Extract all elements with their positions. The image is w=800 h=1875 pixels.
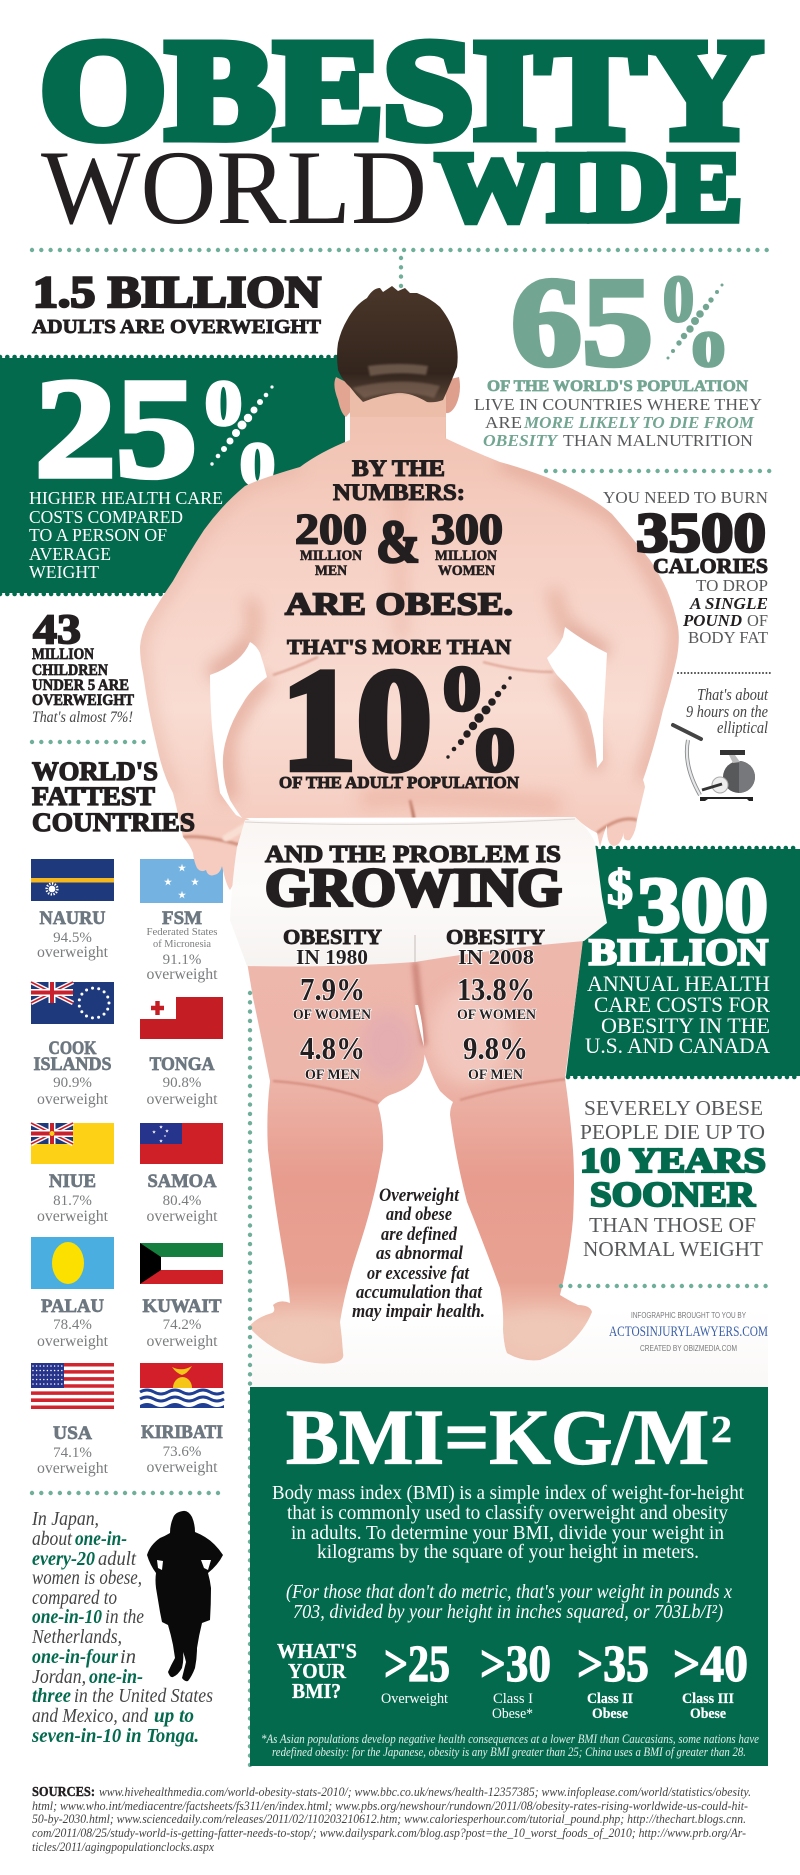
flag: Tonga [140,997,223,1039]
what's your BMI: WHAT'S [277,1639,357,1663]
stat: 10 years sooner: THAN THOSE OF [589,1213,756,1237]
text block: Japan comparison: up to [154,1705,194,1727]
BMI class: class II obese [577,1636,649,1722]
stat: 10 years sooner: NORMAL WEIGHT [583,1237,763,1261]
flag: Kuwait [140,1243,223,1284]
stat: 1.5 billion adults: ADULTS ARE OVERWEIGHT [32,316,321,338]
stat: 43 million children: OVERWEIGHT [32,692,135,709]
big number 25%: 0 [205,368,242,438]
text block: the problem is growing: GROWING [265,858,562,918]
heading: NUMBERS: [333,480,465,505]
country: Nauru: NAURU [40,908,106,929]
panel: 300 billion [566,848,800,1077]
icon: woman silhouette [147,1511,223,1681]
what's your BMI [277,1639,357,1703]
column: obesity in 2008: 9.8% [463,1030,528,1066]
country: Kuwait: 74.2% [163,1317,201,1333]
stat: 3500 calories: TO DROP [696,576,768,595]
BMI class: class I obese: Class I [493,1691,533,1707]
stat: 43 million children: MILLION [32,646,94,663]
stat: 65 percent [474,252,762,450]
sources: ticles/2011/agingpopulationclocks.aspx [32,1839,214,1854]
BMI class: overweight: Overweight [381,1691,449,1707]
big number 25%: 25 [35,349,197,507]
stat: 10 years sooner [580,1096,766,1261]
stat: 3500 calories: CALORIES [653,554,768,578]
text block: Japan comparison: one-in-four [32,1646,118,1668]
column: obesity in 2008: OF MEN [468,1067,523,1083]
heading [333,456,465,505]
country: Kiribati: 73.6% [163,1444,201,1460]
text block: Japan comparison: adult [98,1548,136,1570]
BMI class: class III obese: Class III [682,1691,734,1707]
caption: ANNUAL HEALTH [587,971,770,996]
text block: Japan comparison: and Mexico, and [32,1705,149,1727]
BMI class: class I obese: Obese* [492,1706,533,1722]
text block: definition of overweight [352,1185,485,1322]
country: Kiribati: overweight [146,1459,218,1476]
stat: 43 million children: CHILDREN [32,662,108,679]
column: obesity in 2008 [446,925,545,1083]
legs [240,930,600,1370]
big number $300 billion: $ [607,859,633,915]
column: obesity in 1980: 4.8% [300,1030,365,1066]
country: Kiribati [141,1422,223,1476]
text block: Japan comparison: one-in- [75,1528,127,1550]
country: Cook Islands: COOK [48,1038,97,1059]
BMI class: class III obese: >40 [673,1636,748,1693]
country: Niue [37,1171,109,1225]
gaps between arms and body [210,642,267,818]
country: Samoa: overweight [146,1208,218,1225]
column: obesity in 1980: OBESITY [283,925,382,949]
BMI class: class II obese: >35 [577,1636,649,1693]
metric note: 703, divided by your height in inches squared, or 703Lb/I²) [293,1602,723,1623]
country: Cook Islands [34,1038,112,1108]
floor shadow [252,1310,768,1387]
country: Palau: PALAU [41,1296,104,1317]
text block: definition of overweight: accumulation that [356,1282,483,1303]
are obese: ARE OBESE. [285,586,513,622]
BMI class: class I obese [480,1636,551,1722]
column: obesity in 1980: 7.9% [300,971,365,1007]
head and neck [334,286,460,445]
text block: by the numbers [279,456,520,801]
stat: 43 million children: That's almost 7%! [32,709,133,726]
BMI definition: kilograms by the square of your height in meters. [317,1542,699,1563]
caption: CARE COSTS FOR [594,992,770,1017]
200 million men [295,506,367,579]
hair [337,286,458,402]
BMI definition: in adults. To determine your BMI, divide your weight in [291,1523,724,1544]
text block: Japan comparison: seven-in-10 in Tonga. [31,1725,199,1747]
country: Palau: overweight [37,1333,109,1350]
big number $300 billion [589,859,768,974]
big number 65%: 0 [663,263,694,336]
flag: USA [31,1363,114,1409]
caption: COSTS COMPARED [29,507,183,527]
text block: Japan comparison: in the United States [74,1685,213,1707]
note: elliptical hours: elliptical [717,718,768,737]
200 million men: MEN [315,563,347,579]
country: Kuwait: KUWAIT [142,1296,222,1317]
300 million women: MILLION [435,548,497,564]
big number 25%: 0 [240,432,275,499]
title [40,10,762,246]
big number 25% [35,349,275,507]
BMI class: class I obese: >30 [480,1636,551,1693]
sources: html; www.who.int/mediacentre/factsheets/fs311/en/index.html; www.pbs.org/newshour/rundown/2011/08/obesity-rates-rising-worldwide-us-could-hit- [32,1798,748,1813]
note: elliptical hours: 9 hours on the [686,702,768,721]
credits [609,1311,768,1353]
torso and arms [130,410,690,900]
text block: Japan comparison: three [32,1685,71,1707]
sources [32,1784,751,1854]
country: Niue: 81.7% [53,1193,92,1209]
metric note [286,1582,732,1623]
heading: BY THE [352,456,445,481]
text block: the problem is growing: AND THE PROBLEM IS [265,842,561,868]
stat: 43 million children: UNDER 5 ARE [32,677,129,694]
country: FSM: overweight [146,966,218,983]
BMI class: class III obese [673,1636,748,1722]
stat: 65 percent: OBESITY [483,431,559,450]
text block: definition of overweight: or excessive fat [367,1263,470,1284]
of the adult population: OF THE ADULT POPULATION [279,773,520,792]
stat: 3500 calories: BODY FAT [688,628,769,647]
text block: definition of overweight: and obese [386,1204,452,1225]
title line: wide: WIDE [436,133,742,242]
stat: 3500 calories: POUND [682,611,742,630]
title line: world: WORLD [41,129,427,246]
text block: Japan comparison: In Japan, [31,1508,99,1530]
stat: 65 percent: THAN MALNUTRITION [563,431,753,450]
BMI class: class II obese: Obese [592,1706,628,1722]
stat: 3500 calories: OF [747,611,768,630]
text block: definition of overweight: as abnormal [376,1243,464,1264]
text block: definition of overweight: are defined [381,1224,457,1245]
country: USA: 74.1% [53,1445,92,1461]
stat: 65 percent: ARE [485,413,522,432]
text block: the problem is growing [265,842,562,1083]
caption: AVERAGE [29,544,111,564]
text block: Japan comparison: in the [105,1606,144,1628]
country: Tonga [146,1054,218,1108]
text block: Japan comparison: one-in-10 [32,1606,102,1628]
country: Cook Islands: ISLANDS [34,1054,112,1075]
country statistics [34,908,223,1477]
note: elliptical hours: That's about [697,685,768,704]
stat: 3500 calories: YOU NEED TO BURN [603,488,768,507]
column: obesity in 1980: OF MEN [305,1067,360,1083]
stat: 1.5 billion adults [32,268,321,338]
stat: 3500 calories [603,488,769,647]
flag: Palau [31,1237,114,1289]
country: Tonga: TONGA [150,1054,215,1075]
BMI definition [272,1483,745,1563]
country: FSM: 91.1% [163,952,201,968]
caption: HIGHER HEALTH CARE [29,488,223,508]
country: Nauru: 94.5% [53,930,92,946]
what's your BMI: YOUR [288,1659,347,1683]
credits: CREATED BY OBIZMEDIA.COM [640,1344,737,1353]
country: USA [37,1423,109,1477]
column: obesity in 1980: OF WOMEN [293,1007,371,1023]
BMI class: overweight [381,1636,450,1707]
big number 10% [281,639,515,801]
caption: U.S. AND CANADA [585,1033,770,1058]
big number 65% [511,252,725,392]
panel: BMI explanation [250,1387,768,1766]
heading: world's fattest countries: COUNTRIES [32,808,195,837]
flag: Kiribati [140,1363,224,1408]
big number 10%: 0 [475,717,515,785]
column: obesity in 2008: OF WOMEN [457,1007,536,1023]
flags of the fattest countries [31,859,224,1409]
country: Palau: 78.4% [53,1317,92,1333]
country: Samoa: 80.4% [163,1193,201,1209]
big number 65%: 65 [511,252,653,392]
BMI class: overweight: >25 [384,1636,450,1693]
300 million women: 300 [431,506,503,554]
country: Nauru: overweight [37,944,109,961]
country: USA: overweight [37,1460,109,1477]
stat: 1.5 billion adults: 1.5 BILLION [33,268,321,316]
BMI definition: Body mass index (BMI) is a simple index of weight-for-height [272,1483,745,1504]
300 million women [431,506,503,579]
300 million women: WOMEN [438,563,496,579]
stat: 3500 calories: A SINGLE [689,594,768,613]
caption [29,488,223,582]
stat: 10 years sooner: 10 YEARS [580,1141,766,1180]
caption: OBESITY IN THE [601,1013,770,1038]
what's your BMI: BMI? [292,1679,341,1703]
heading: world's fattest countries: FATTEST [32,782,155,811]
flag: Cook Islands [31,982,114,1024]
stat: 10 years sooner: PEOPLE DIE UP TO [580,1120,765,1144]
flag: Samoa [140,1123,223,1164]
country: USA: USA [53,1423,92,1444]
flag: Niue [31,1123,114,1164]
flag: Nauru [31,859,114,901]
country: FSM: FSM [162,908,202,929]
country: FSM: of Micronesia [153,938,211,950]
country: Tonga: overweight [146,1091,218,1108]
big number 10%: 10 [281,639,432,801]
200 million men: 200 [295,506,367,554]
country: Niue: overweight [37,1208,109,1225]
country: Samoa [146,1171,218,1225]
panel: 25 percent health care costs [0,349,345,594]
text block: Japan comparison: in [120,1646,136,1668]
stat: 65 percent: MORE LIKELY TO DIE FROM [523,413,755,432]
ampersand: & [376,509,420,575]
text block: Japan comparison: Netherlands, [31,1626,122,1648]
text block: Japan comparison: Jordan, [32,1666,86,1688]
note: elliptical hours [686,685,768,737]
country: Niue: NIUE [49,1171,96,1192]
text block: definition of overweight: may impair health. [352,1301,485,1322]
caption [585,971,770,1058]
stat: 3500 calories: 3500 [636,502,766,564]
country: FSM [146,908,218,983]
country: FSM: Federated States [146,926,218,938]
text block: Japan comparison: one-in- [89,1666,143,1688]
country: Cook Islands: 90.9% [53,1075,92,1091]
column: obesity in 2008: 13.8% [457,971,535,1007]
sources: SOURCES: [32,1785,95,1800]
caption: OF THE WORLD'S POPULATION [487,378,748,395]
text block: definition of overweight: Overweight [379,1185,460,1206]
country: Palau [37,1296,109,1350]
underwear [230,817,607,966]
big number $300 billion: BILLION [589,932,768,974]
BMI class: class III obese: Obese [690,1706,726,1722]
BMI formula: 2 [711,1409,732,1451]
country: Kiribati: KIRIBATI [141,1422,223,1443]
text block: Japan comparison: compared to [32,1587,117,1609]
footnote [261,1732,759,1759]
column: obesity in 1980 [283,925,382,1083]
text block: Japan comparison: every-20 [32,1548,95,1570]
title line: obesity: OBESITY [40,10,762,168]
stat: 10 years sooner: SOONER [590,1175,756,1214]
column: obesity in 2008: IN 2008 [458,945,534,969]
country: Cook Islands: overweight [37,1091,109,1108]
country: Kuwait: overweight [146,1333,218,1350]
country: Nauru [37,908,109,961]
sources: 50-by-2030.html; www.sciencedaily.com/releases/2011/02/110203210612.htm; www.caloriesperhour.com/tutorial_pound.php; http://thechart.blogs.cnn. [32,1811,746,1826]
heading: world's fattest countries [32,757,195,837]
big number 65%: 0 [692,320,725,376]
stat: 65 percent: LIVE IN COUNTRIES WHERE THEY [474,395,762,414]
country: Kuwait [142,1296,222,1350]
country: Samoa: SAMOA [148,1171,217,1192]
caption: TO A PERSON OF [29,525,167,545]
text block: Japan comparison: about [32,1528,72,1550]
caption: WEIGHT [29,562,99,582]
heading: world's fattest countries: WORLD'S [32,757,158,786]
column: obesity in 1980: IN 1980 [296,945,368,969]
that's more than: THAT'S MORE THAN [287,635,511,659]
stat: 43 million children [32,608,135,726]
BMI definition: that is commonly used to classify overweight and obesity [287,1503,728,1524]
credits: INFOGRAPHIC BROUGHT TO YOU BY [631,1311,747,1320]
country: Tonga: 90.8% [163,1075,201,1091]
icon: elliptical machine [673,725,755,801]
flag: FSM [140,859,223,903]
BMI class: class II obese: Class II [587,1691,633,1707]
text block: Japan comparison [31,1508,213,1747]
BMI formula: BMI=KG/M [286,1394,709,1480]
big number $300 billion: 300 [637,861,768,948]
column: obesity in 2008: OBESITY [446,925,545,949]
photo: overweight man from behind [130,286,690,1370]
stat: 43 million children: 43 [33,608,81,654]
big number 10%: 0 [443,653,481,724]
stat: 10 years sooner: SEVERELY OBESE [584,1096,763,1120]
text block: Japan comparison: women is obese, [32,1567,142,1589]
metric note: (For those that don't do metric, that's your weight in pounds x [286,1582,732,1603]
200 million men: MILLION [300,548,362,564]
